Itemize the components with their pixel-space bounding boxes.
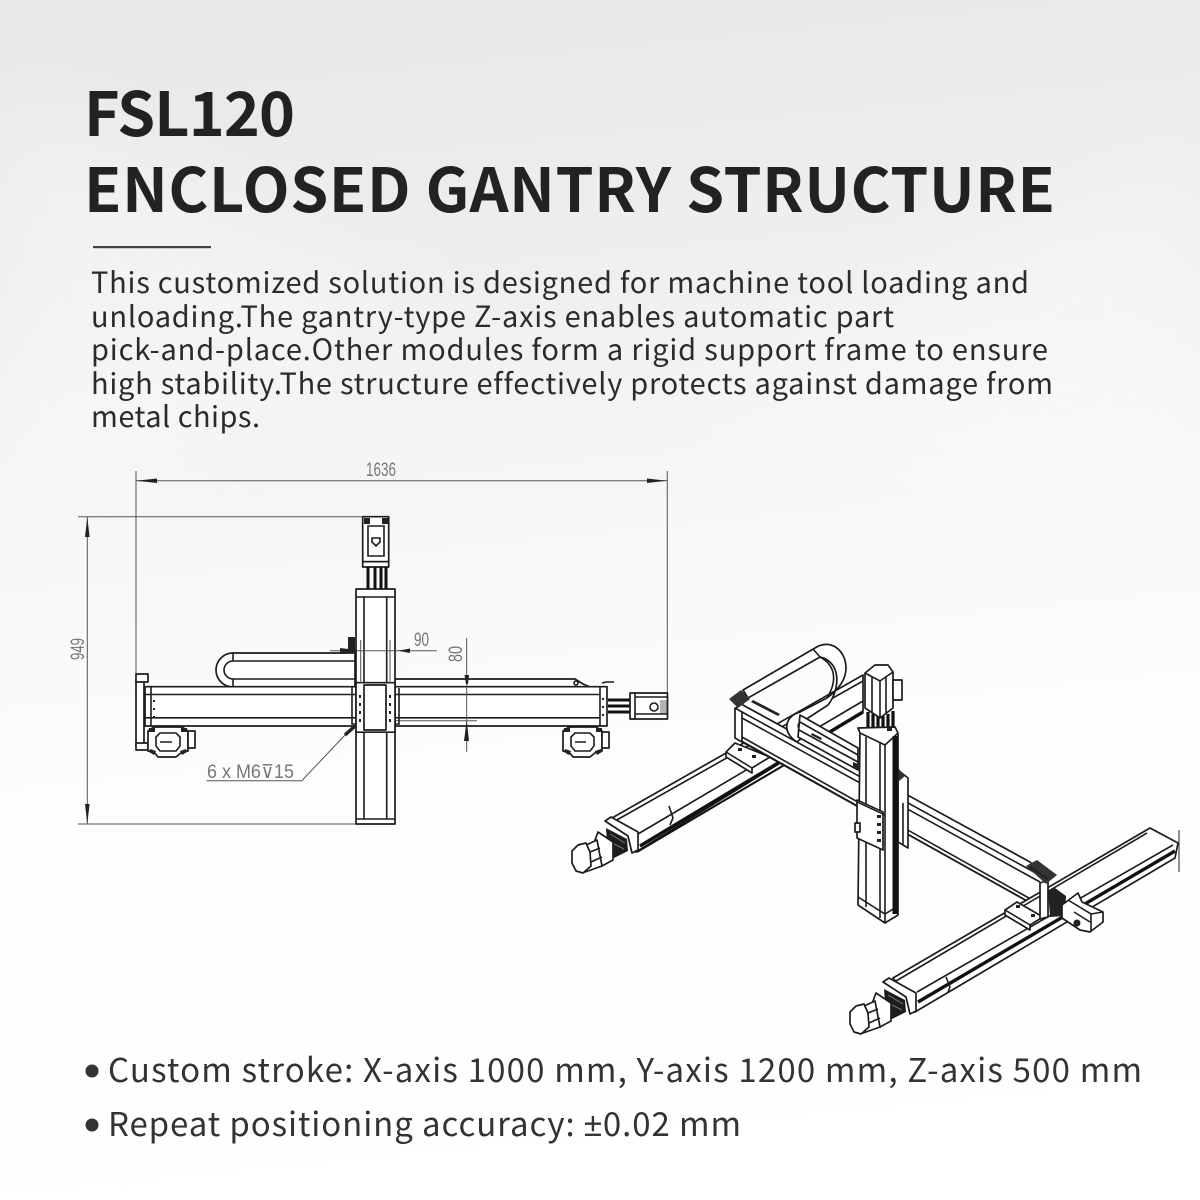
X-axis gantry beam (735, 700, 1045, 912)
description paragraph: This customized solution is designed for machine tool loading and (91, 260, 1029, 302)
Z-axis carriage (855, 800, 885, 850)
dimension: 90 (330, 630, 437, 683)
description paragraph: metal chips. (91, 394, 260, 436)
isometric view of gantry (572, 644, 1179, 1034)
bullet: positioning accuracy: Repeat positioning accuracy: ±0.02 mm (108, 1098, 741, 1146)
description paragraph: unloading.The gantry-type Z-axis enables automatic part (91, 294, 894, 336)
title rule (93, 246, 211, 248)
dimension: height 949 (68, 517, 363, 824)
feature bullets (86, 1044, 1142, 1146)
description paragraph (91, 260, 1053, 436)
servo motor, right (563, 727, 609, 757)
rear rail end and motor (572, 817, 638, 873)
front Y-axis rail (893, 828, 1179, 1012)
horizontal motor and coupling (608, 693, 668, 719)
dimension: 80: 80 (446, 646, 467, 662)
description paragraph: high stability.The structure effectively protects against damage from (91, 361, 1053, 403)
title: ENCLOSED GANTRY STRUCTURE (84, 141, 1055, 230)
servo motor, left (148, 727, 195, 757)
front mounting plate (1005, 902, 1043, 930)
dimension: height 949: 949 (68, 638, 89, 660)
description paragraph: pick-and-place.Other modules form a rigid support frame to ensure (91, 327, 1048, 369)
Z-axis column (858, 727, 898, 923)
title (84, 65, 1055, 230)
Z-axis column (352, 589, 399, 824)
cable chain, right (395, 679, 614, 687)
cable chain, left (216, 653, 355, 687)
technical drawing: dimensioned front view (68, 460, 668, 824)
front rail end and motor (850, 978, 916, 1034)
Z-axis motor (363, 517, 389, 589)
rear Y-axis rail (612, 675, 863, 852)
side bracket behind column (898, 768, 908, 848)
Z-axis coupling (868, 711, 893, 736)
rear mounting plate (726, 743, 770, 773)
dimension: 90: 90 (414, 630, 429, 651)
cable chain, lower run (798, 715, 858, 770)
dimension: width 1636: 1636 (366, 460, 396, 481)
leader note: 6 x M6 depth 15: 6 x M6⊽15 (207, 762, 294, 783)
Z-axis motor (865, 665, 902, 718)
dimension: 80 (446, 638, 469, 752)
cable chain, upper loop (729, 644, 846, 742)
coupling and X-axis motor (1048, 888, 1103, 932)
bullet: custom stroke: Custom stroke: X-axis 1000 mm, Y-axis 1200 mm, Z-axis 500 mm (108, 1044, 1142, 1092)
beam end cap and chain mount (1026, 860, 1057, 919)
left end bracket (136, 674, 148, 750)
dimension: width 1636 (136, 460, 667, 693)
leader note: 6 x M6 depth 15 (207, 726, 355, 783)
title: FSL120 (84, 65, 295, 154)
X-axis beam (145, 687, 607, 726)
